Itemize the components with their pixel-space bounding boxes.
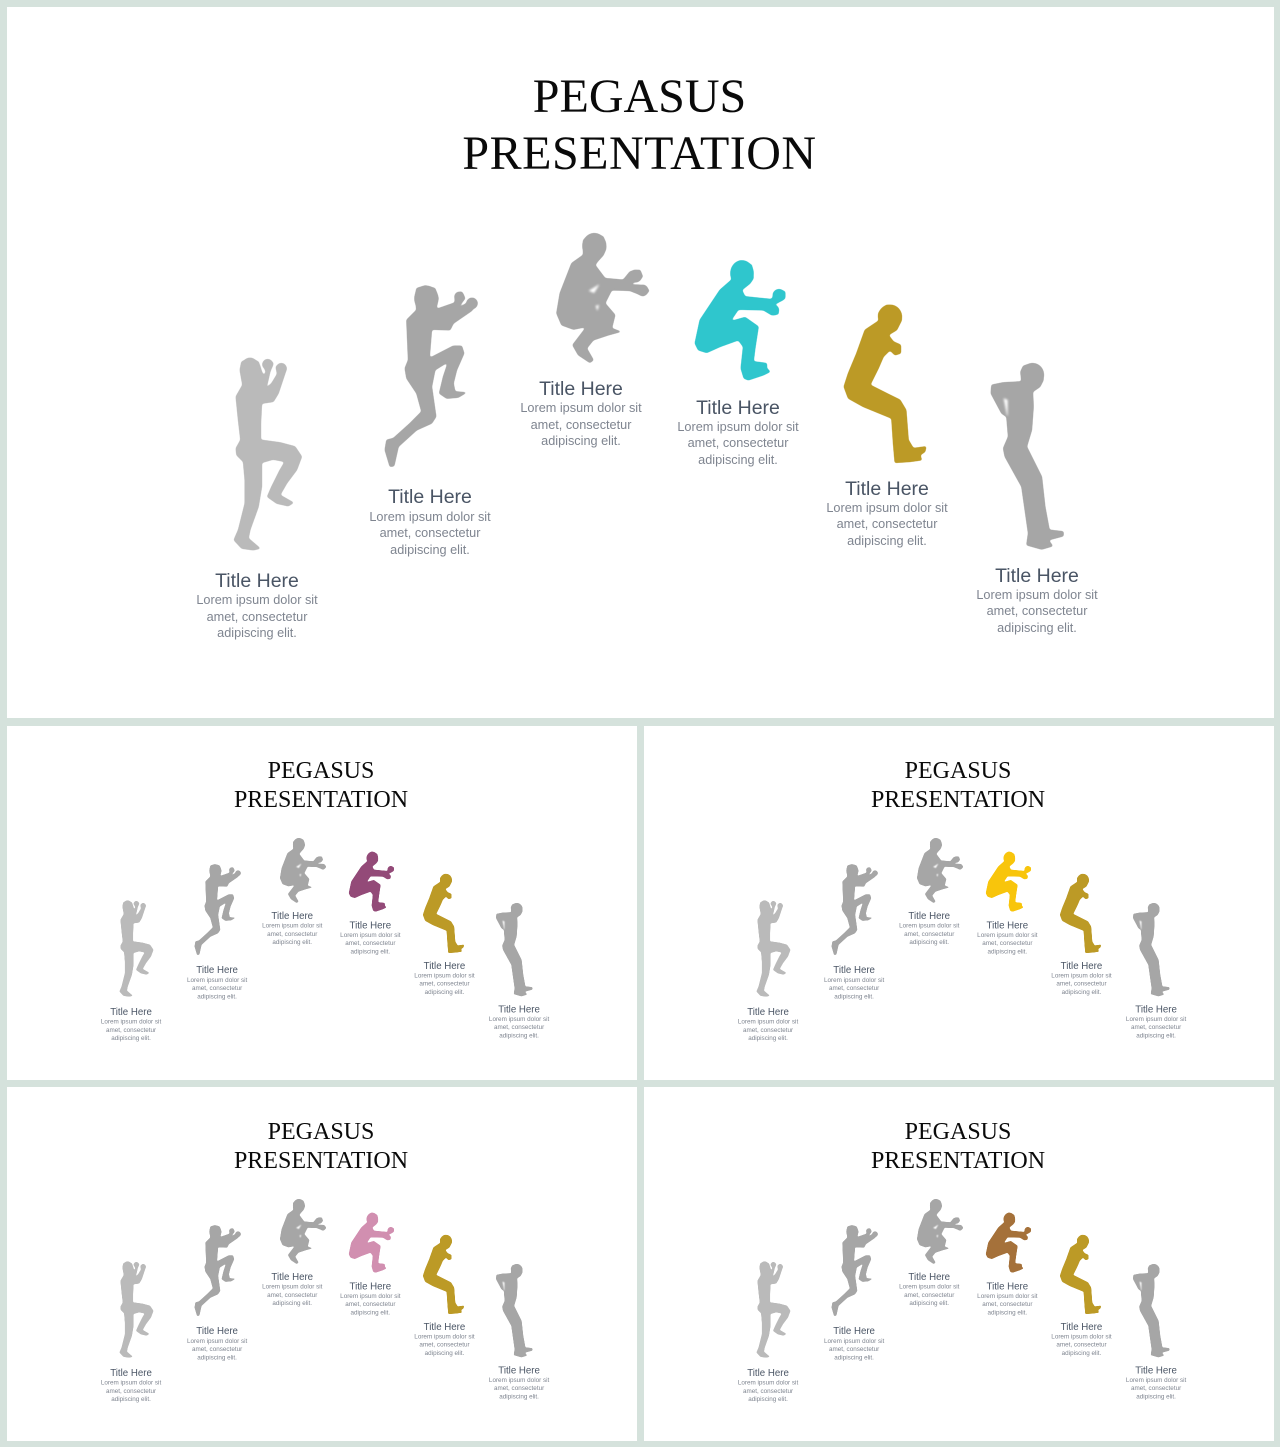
- panel: main slide, teal highlight: [7, 7, 1274, 718]
- figure row with captions: amet, consectetur: [1056, 1341, 1107, 1349]
- step 5: gold figure and caption: Title Here: [845, 478, 929, 500]
- title: PEGASUS: [268, 758, 374, 784]
- panel: variant with pink highlight: [7, 1087, 637, 1441]
- step 2: figure and caption: Lorem ipsum dolor sit: [369, 510, 491, 524]
- figure row with captions: amet, consectetur: [267, 931, 317, 938]
- figure row with captions: adipiscing elit.: [834, 993, 874, 1001]
- figure row with captions: amet, consectetur: [419, 1341, 470, 1349]
- panel: variant with yellow highlight: [644, 726, 1274, 1080]
- figure row with captions: amet, consectetur: [743, 1388, 793, 1395]
- step 4: highlighted teal figure and caption: amet, consectetur: [688, 436, 789, 450]
- figure row with captions: Lorem ipsum dolor sit: [414, 1333, 475, 1341]
- figure row with captions: adipiscing elit.: [272, 1300, 312, 1307]
- figure row with captions: amet, consectetur: [904, 1292, 954, 1299]
- figure row with captions: adipiscing elit.: [834, 1354, 874, 1362]
- figure row with captions: adipiscing elit.: [111, 1035, 151, 1042]
- figure row with captions: Lorem ipsum dolor sit: [262, 922, 323, 930]
- figure row with captions: adipiscing elit.: [111, 1396, 151, 1403]
- step 3: figure and caption: adipiscing elit.: [541, 434, 621, 448]
- figure row with captions: adipiscing elit.: [909, 939, 949, 946]
- figure row with captions: Title Here: [987, 920, 1028, 932]
- step 6: figure and caption: [976, 363, 1098, 635]
- step 1: figure and caption: adipiscing elit.: [217, 626, 297, 640]
- panel: variant with maroon highlight: [7, 726, 637, 1080]
- figure row with captions: amet, consectetur: [1131, 1024, 1181, 1031]
- figure row with captions: [101, 838, 550, 1042]
- figure row with captions: adipiscing elit.: [909, 1300, 949, 1307]
- figure row with captions: amet, consectetur: [419, 980, 470, 988]
- figure row with captions: amet, consectetur: [192, 1346, 242, 1353]
- figure row with captions: Lorem ipsum dolor sit: [489, 1016, 550, 1023]
- figure row with captions: amet, consectetur: [829, 985, 879, 992]
- step 5: gold figure and caption: Lorem ipsum dolor sit: [826, 501, 948, 515]
- step 6: figure and caption: Title Here: [995, 565, 1079, 587]
- step 6: figure and caption: amet, consectetur: [987, 604, 1088, 618]
- figure row with captions: [738, 838, 1187, 1042]
- figure row with captions: Title Here: [908, 911, 950, 922]
- panel: variant with brown highlight: [644, 1087, 1274, 1441]
- figure row with captions: adipiscing elit.: [988, 1309, 1027, 1317]
- figure row with captions: Lorem ipsum dolor sit: [738, 1018, 798, 1026]
- figure row with captions: amet, consectetur: [743, 1027, 793, 1034]
- figure row with captions: Lorem ipsum dolor sit: [101, 1379, 161, 1387]
- figure row with captions: adipiscing elit.: [425, 989, 465, 996]
- title: PRESENTATION: [462, 127, 817, 180]
- step 1: figure and caption: [196, 358, 318, 640]
- figure row with captions: amet, consectetur: [494, 1385, 544, 1392]
- figure row with captions: adipiscing elit.: [1062, 1350, 1102, 1357]
- figure row with captions: adipiscing elit.: [197, 993, 237, 1001]
- figure row with captions: Lorem ipsum dolor sit: [899, 922, 960, 930]
- figure row with captions: Lorem ipsum dolor sit: [187, 1338, 248, 1345]
- step 2: figure and caption: [369, 286, 491, 557]
- title: PRESENTATION: [234, 787, 408, 813]
- figure row with captions: adipiscing elit.: [1136, 1393, 1176, 1401]
- step 1: figure and caption: Title Here: [215, 570, 299, 592]
- figure row with captions: Title Here: [1061, 961, 1102, 972]
- figure row with captions: Title Here: [1061, 1322, 1102, 1333]
- step 2: figure and caption: adipiscing elit.: [390, 543, 470, 557]
- figure row with captions: Title Here: [350, 1281, 391, 1293]
- figure row with captions: amet, consectetur: [829, 1346, 879, 1353]
- figure row with captions: amet, consectetur: [345, 1301, 395, 1308]
- figure row with captions: Lorem ipsum dolor sit: [1126, 1016, 1187, 1023]
- figure row with captions: Lorem ipsum dolor sit: [262, 1283, 323, 1291]
- figure row with captions: Lorem ipsum dolor sit: [414, 972, 475, 980]
- step 3: figure and caption: Title Here: [539, 378, 623, 400]
- step 1: figure and caption: Lorem ipsum dolor sit: [196, 593, 318, 607]
- step 3: figure and caption: amet, consectetur: [531, 418, 632, 432]
- figure row with captions: Lorem ipsum dolor sit: [340, 932, 401, 939]
- figure row with captions: Title Here: [196, 965, 238, 976]
- step 3: figure and caption: Lorem ipsum dolor sit: [520, 401, 642, 415]
- step 6: figure and caption: adipiscing elit.: [997, 621, 1077, 635]
- figure row with captions: Title Here: [350, 920, 391, 932]
- figure row with captions: amet, consectetur: [982, 1301, 1032, 1308]
- figure row with captions: amet, consectetur: [267, 1292, 317, 1299]
- figure row with captions: Lorem ipsum dolor sit: [977, 1293, 1038, 1300]
- title: PEGASUS: [905, 758, 1011, 784]
- figure row with captions: adipiscing elit.: [748, 1396, 788, 1403]
- figure row with captions: Lorem ipsum dolor sit: [340, 1293, 401, 1300]
- figure row with captions: Title Here: [1135, 1004, 1177, 1016]
- figure row with captions: Lorem ipsum dolor sit: [977, 932, 1038, 939]
- figure row with captions: amet, consectetur: [982, 940, 1032, 947]
- step 2: figure and caption: Title Here: [388, 486, 472, 508]
- step 4: highlighted teal figure and caption: Title Here: [696, 397, 780, 419]
- figure row with captions: Title Here: [110, 1007, 152, 1018]
- figure row with captions: amet, consectetur: [904, 931, 954, 938]
- figure row with captions: Title Here: [1135, 1365, 1177, 1377]
- figure row with captions: amet, consectetur: [1056, 980, 1107, 988]
- figure row with captions: Title Here: [498, 1004, 540, 1016]
- figure row with captions: Lorem ipsum dolor sit: [1051, 1333, 1112, 1341]
- figure row with captions: Lorem ipsum dolor sit: [489, 1377, 550, 1384]
- figure row with captions: [101, 1199, 550, 1403]
- step 4: highlighted teal figure and caption: [677, 261, 799, 467]
- figure row with captions: amet, consectetur: [1131, 1385, 1181, 1392]
- figure row with captions: Title Here: [196, 1326, 238, 1337]
- figure row with captions: Title Here: [424, 961, 465, 972]
- figure row with captions: adipiscing elit.: [197, 1354, 237, 1362]
- title: PEGASUS: [268, 1119, 374, 1145]
- title: PRESENTATION: [871, 1148, 1045, 1174]
- figure row with captions: adipiscing elit.: [351, 948, 390, 956]
- figure row with captions: amet, consectetur: [494, 1024, 544, 1031]
- figure row with captions: Lorem ipsum dolor sit: [824, 1338, 885, 1345]
- figure row with captions: amet, consectetur: [106, 1027, 156, 1034]
- figure row with captions: adipiscing elit.: [748, 1035, 788, 1042]
- figure row with captions: Title Here: [747, 1007, 789, 1018]
- figure row with captions: adipiscing elit.: [1136, 1032, 1176, 1040]
- figure row with captions: adipiscing elit.: [425, 1350, 465, 1357]
- step 5: gold figure and caption: adipiscing elit.: [847, 534, 927, 548]
- figure row with captions: adipiscing elit.: [499, 1032, 539, 1040]
- step 4: highlighted teal figure and caption: Lorem ipsum dolor sit: [677, 420, 799, 434]
- figure row with captions: adipiscing elit.: [988, 948, 1027, 956]
- figure row with captions: adipiscing elit.: [499, 1393, 539, 1401]
- figure row with captions: adipiscing elit.: [351, 1309, 390, 1317]
- figure row with captions: Title Here: [987, 1281, 1028, 1293]
- title: PRESENTATION: [871, 787, 1045, 813]
- step 4: highlighted teal figure and caption: adipiscing elit.: [698, 453, 778, 467]
- step 5: gold figure and caption: amet, consectetur: [837, 517, 938, 531]
- figure row with captions: Lorem ipsum dolor sit: [187, 977, 248, 984]
- step 1: figure and caption: amet, consectetur: [207, 610, 308, 624]
- figure row with captions: Lorem ipsum dolor sit: [101, 1018, 161, 1026]
- figure row with captions: Title Here: [908, 1272, 950, 1283]
- figure row with captions: Title Here: [833, 1326, 875, 1337]
- figure row with captions: Lorem ipsum dolor sit: [899, 1283, 960, 1291]
- figure row with captions: Lorem ipsum dolor sit: [1051, 972, 1112, 980]
- title: PEGASUS: [533, 70, 746, 123]
- figure row with captions: Lorem ipsum dolor sit: [738, 1379, 798, 1387]
- figure row with captions: Lorem ipsum dolor sit: [824, 977, 885, 984]
- figure row with captions: amet, consectetur: [345, 940, 395, 947]
- title: PRESENTATION: [234, 1148, 408, 1174]
- figure row with captions: Lorem ipsum dolor sit: [1126, 1377, 1187, 1384]
- step 3: figure and caption: [520, 233, 649, 448]
- figure row with captions: adipiscing elit.: [272, 939, 312, 946]
- figure row with captions: Title Here: [271, 911, 313, 922]
- figure row with captions: Title Here: [747, 1368, 789, 1379]
- title: PEGASUS: [905, 1119, 1011, 1145]
- figure row with captions: Title Here: [271, 1272, 313, 1283]
- figure row with captions: amet, consectetur: [106, 1388, 156, 1395]
- figure row with captions: amet, consectetur: [192, 985, 242, 992]
- figure row with captions: Title Here: [498, 1365, 540, 1377]
- figure row with captions: adipiscing elit.: [1062, 989, 1102, 996]
- step 2: figure and caption: amet, consectetur: [380, 526, 481, 540]
- figure row with captions: Title Here: [424, 1322, 465, 1333]
- figure row with captions: Title Here: [110, 1368, 152, 1379]
- figure row with captions: Title Here: [833, 965, 875, 976]
- step 5: gold figure and caption: [826, 305, 948, 548]
- step 6: figure and caption: Lorem ipsum dolor sit: [976, 588, 1098, 602]
- figure row with captions: [738, 1199, 1187, 1403]
